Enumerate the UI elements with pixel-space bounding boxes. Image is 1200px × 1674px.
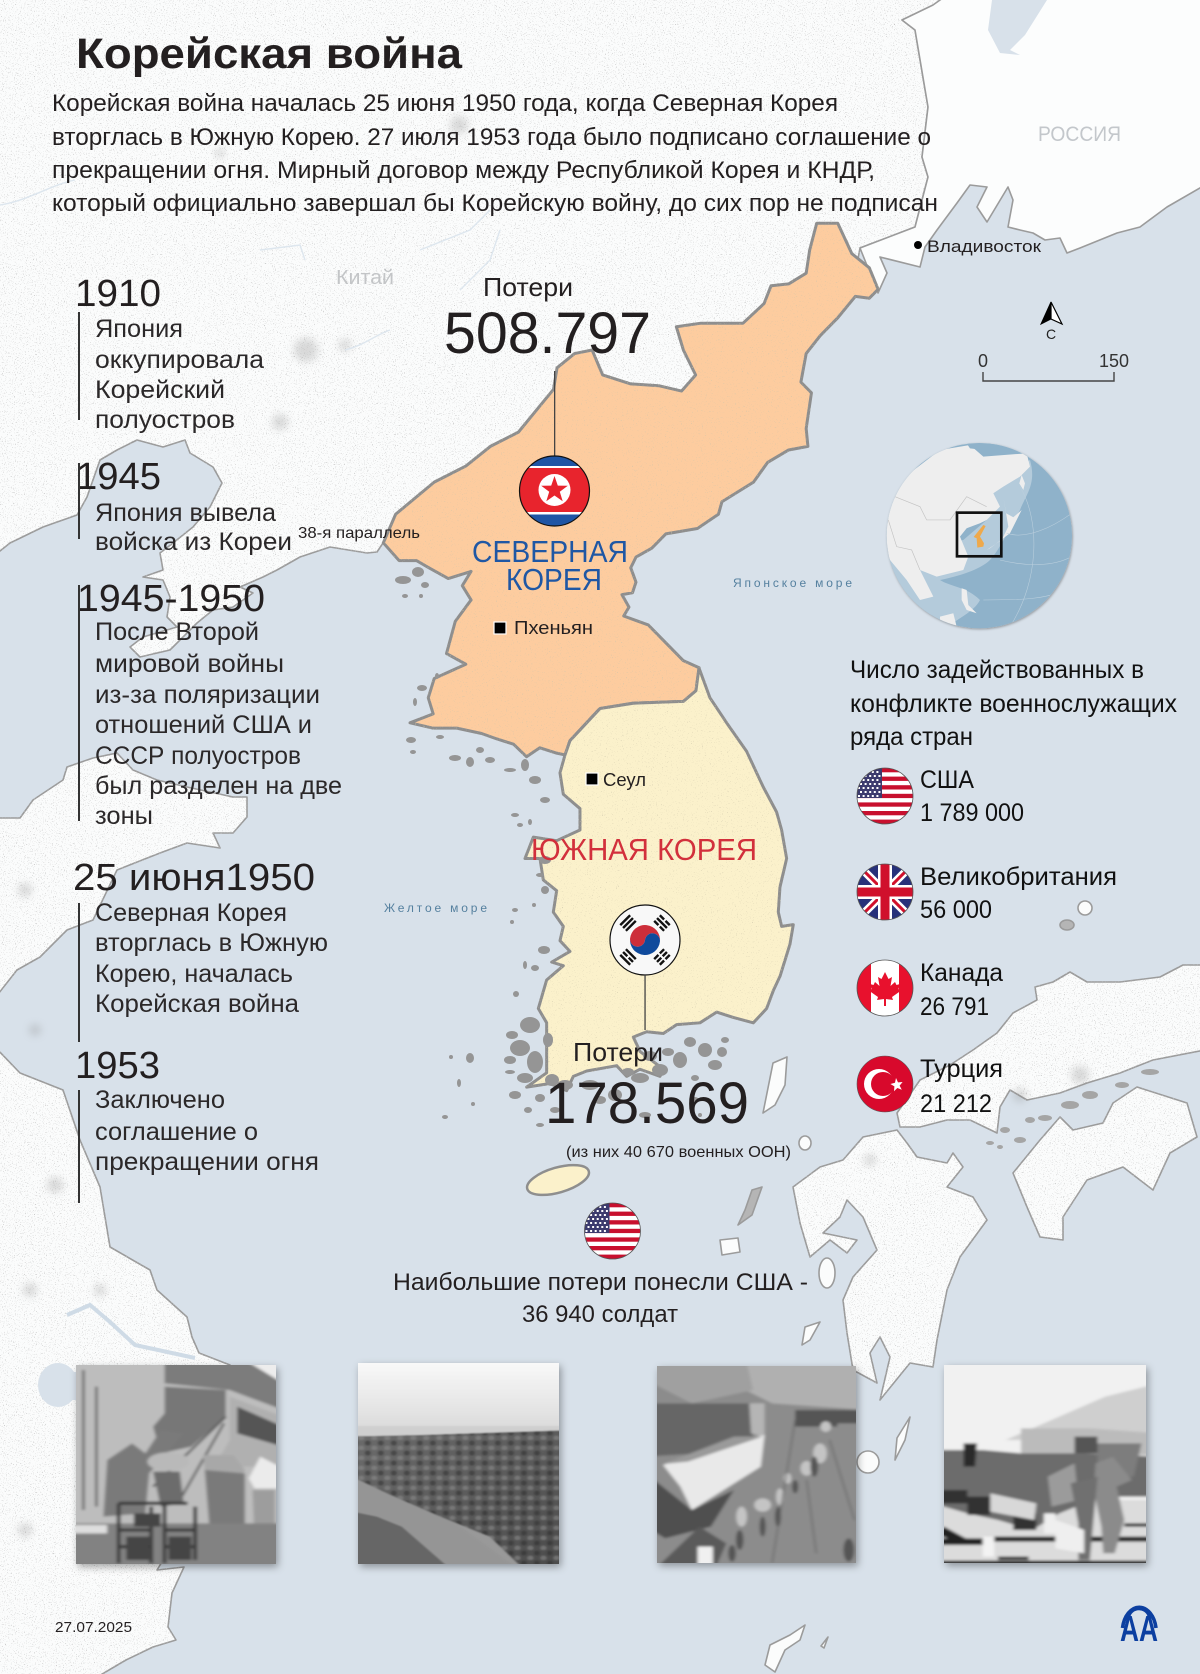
panel: troop contributions heading: ряда стран: [850, 723, 973, 751]
panel: troop contributions heading: [850, 656, 1177, 751]
timeline: 1945-1950: зоны: [95, 802, 153, 830]
timeline: 25 June 1950: 25 июня1950: [73, 857, 315, 899]
intro paragraph: прекращении огня. Мирный договор между Республикой Корея и КНДР,: [52, 157, 875, 184]
panel: troop contributions heading: конфликте военнослужащих: [850, 690, 1177, 718]
city light patches: [18, 116, 1089, 1537]
timeline: 1945: войска из Кореи: [95, 528, 292, 556]
South Korea losses: (из них 40 670 военных ООН): [566, 1144, 791, 1161]
row: Turkey: [857, 1055, 1003, 1118]
timeline: 1910: полуостров: [95, 406, 235, 434]
timeline: 1945: Япония вывела: [95, 499, 276, 527]
row: Canada: 26 791: [920, 993, 989, 1021]
row: USA: [857, 766, 1024, 827]
land: East China coast: [0, 1047, 230, 1674]
South Korea losses: Потери: [573, 1037, 663, 1067]
islands: Japan: [720, 901, 1092, 1672]
timeline: 1953: прекращении огня: [95, 1148, 319, 1176]
timeline: 1953: Заключено: [95, 1086, 225, 1114]
timeline: 25 June 1950: [73, 857, 328, 1042]
timeline: 1910: 1910: [75, 273, 161, 315]
land: Shikoku: [1013, 1087, 1197, 1240]
timeline: 1910: [75, 273, 264, 434]
row: USA: США: [920, 766, 974, 794]
timeline: 1945-1950: был разделен на две: [95, 772, 342, 800]
city: Seoul: Сеул: [603, 770, 646, 790]
scale bar: 150: [1099, 351, 1129, 371]
photo 1: soldiers boarding ship: [65, 1357, 287, 1573]
timeline: 1945: 1945: [76, 456, 161, 498]
timeline: 1945-1950: отношений США и: [95, 711, 312, 739]
South Korea losses: [545, 975, 791, 1161]
timeline: 25 June 1950: вторглась в Южную: [95, 929, 328, 957]
land: Russia Primorye: [860, 0, 1200, 293]
North Korea territory: [383, 223, 878, 757]
sea label: Yellow Sea: Желтое море: [384, 901, 487, 915]
land: China and Manchuria: [0, 0, 955, 657]
timeline: 1945-1950: 1945-1950: [77, 578, 265, 620]
icon: South Korea flag: [610, 905, 680, 975]
scale bar: [978, 351, 1129, 381]
row: Turkey: 21 212: [920, 1090, 992, 1118]
US losses callout: Наибольшие потери понесли США -: [393, 1269, 808, 1296]
land: Honshu: [897, 965, 1200, 1133]
row: United Kingdom: Великобритания: [920, 863, 1117, 891]
icon: North Korea flag: [520, 456, 590, 526]
country label: Россия: РОССИЯ: [1038, 123, 1121, 146]
islands: Seto Inland Sea: [986, 1069, 1159, 1149]
South Korea losses: 178.569: [545, 1071, 749, 1136]
Korean coastal islands: [395, 567, 729, 1127]
timeline: 25 June 1950: Северная Корея: [95, 899, 287, 927]
icon: north arrow: [1041, 302, 1062, 342]
row: Canada: [857, 959, 1003, 1021]
timeline: 1945-1950: После Второй: [95, 618, 259, 646]
photo 2: seated soldiers: [355, 1361, 566, 1572]
North Korea losses: [444, 272, 651, 457]
intro paragraph: Корейская война началась 25 июня 1950 года, когда Северная Корея: [52, 90, 838, 117]
timeline: 1945-1950: СССР полуостров: [95, 742, 301, 770]
North Korea losses: Потери: [483, 272, 573, 302]
row: United Kingdom: [857, 863, 1117, 924]
timeline: 1953: 1953: [75, 1045, 160, 1087]
city: Seoul: [586, 770, 646, 790]
row: Turkey: Турция: [920, 1055, 1003, 1083]
Jeju island: [524, 1159, 592, 1201]
South Korea territory: [525, 668, 793, 1091]
timeline: 25 June 1950: Корею, началась: [95, 960, 293, 988]
timeline: 1945: [76, 456, 292, 556]
timeline: 1910: Корейский: [95, 376, 225, 404]
intro paragraph: вторглась в Южную Корею. 27 июля 1953 года было подписано соглашение о: [52, 124, 931, 151]
timeline: 1910: Япония: [95, 315, 183, 343]
city: Pyongyang: Пхеньян: [514, 618, 593, 638]
38th parallel label: 38-я параллель: [298, 525, 420, 542]
timeline: 1953: соглашение о: [95, 1118, 258, 1146]
scale bar: 0: [978, 351, 988, 371]
label: South Korea: ЮЖНАЯ КОРЕЯ: [531, 832, 757, 867]
US losses callout: [393, 1203, 808, 1328]
timeline: 1953: [75, 1045, 319, 1203]
sea label: Sea of Japan: Японское море: [733, 576, 852, 590]
intro paragraph: который официально завершал бы Корейскую войну, до сих пор не подписан: [52, 190, 938, 217]
label: North Korea: СЕВЕРНАЯ: [472, 534, 628, 569]
land: Kyushu: [793, 1130, 987, 1400]
US losses callout: 36 940 солдат: [522, 1301, 678, 1328]
label: North Korea: [472, 534, 628, 597]
timeline: 25 June 1950: Корейская война: [95, 990, 299, 1018]
locator globe: [873, 443, 1072, 633]
intro paragraph: [52, 90, 938, 217]
country label: Китай: Китай: [336, 267, 394, 289]
icon: north arrow: С: [1046, 326, 1056, 342]
timeline: 1945-1950: мировой войны: [95, 650, 284, 678]
title: Корейская война: [76, 30, 463, 78]
row: USA: 1 789 000: [920, 799, 1024, 827]
timeline: 1910: оккупировала: [95, 346, 264, 374]
logo: Anadolu Agency: AA: [1120, 1608, 1158, 1649]
North Korea losses: 508.797: [444, 301, 651, 366]
row: United Kingdom: 56 000: [920, 896, 992, 924]
city: Vladivostok: Владивосток: [927, 237, 1042, 256]
label: North Korea: КОРЕЯ: [506, 562, 602, 597]
panel: troop contributions heading: Число задействованных в: [850, 656, 1144, 684]
photo 4: soldiers marching with luggage: [933, 1357, 1159, 1573]
water: Yangtze estuary and Hangzhou bay: [38, 1305, 195, 1407]
rivers: [0, 180, 500, 350]
timeline: 1945-1950: [77, 578, 342, 830]
row: Canada: Канада: [920, 959, 1003, 987]
land: Shandong peninsula: [0, 753, 247, 998]
timeline: 1945-1950: из-за поляризации: [95, 681, 320, 709]
date: 27.07.2025: [55, 1619, 132, 1636]
photo 3: soldiers on dock beside boat: [654, 1364, 863, 1571]
